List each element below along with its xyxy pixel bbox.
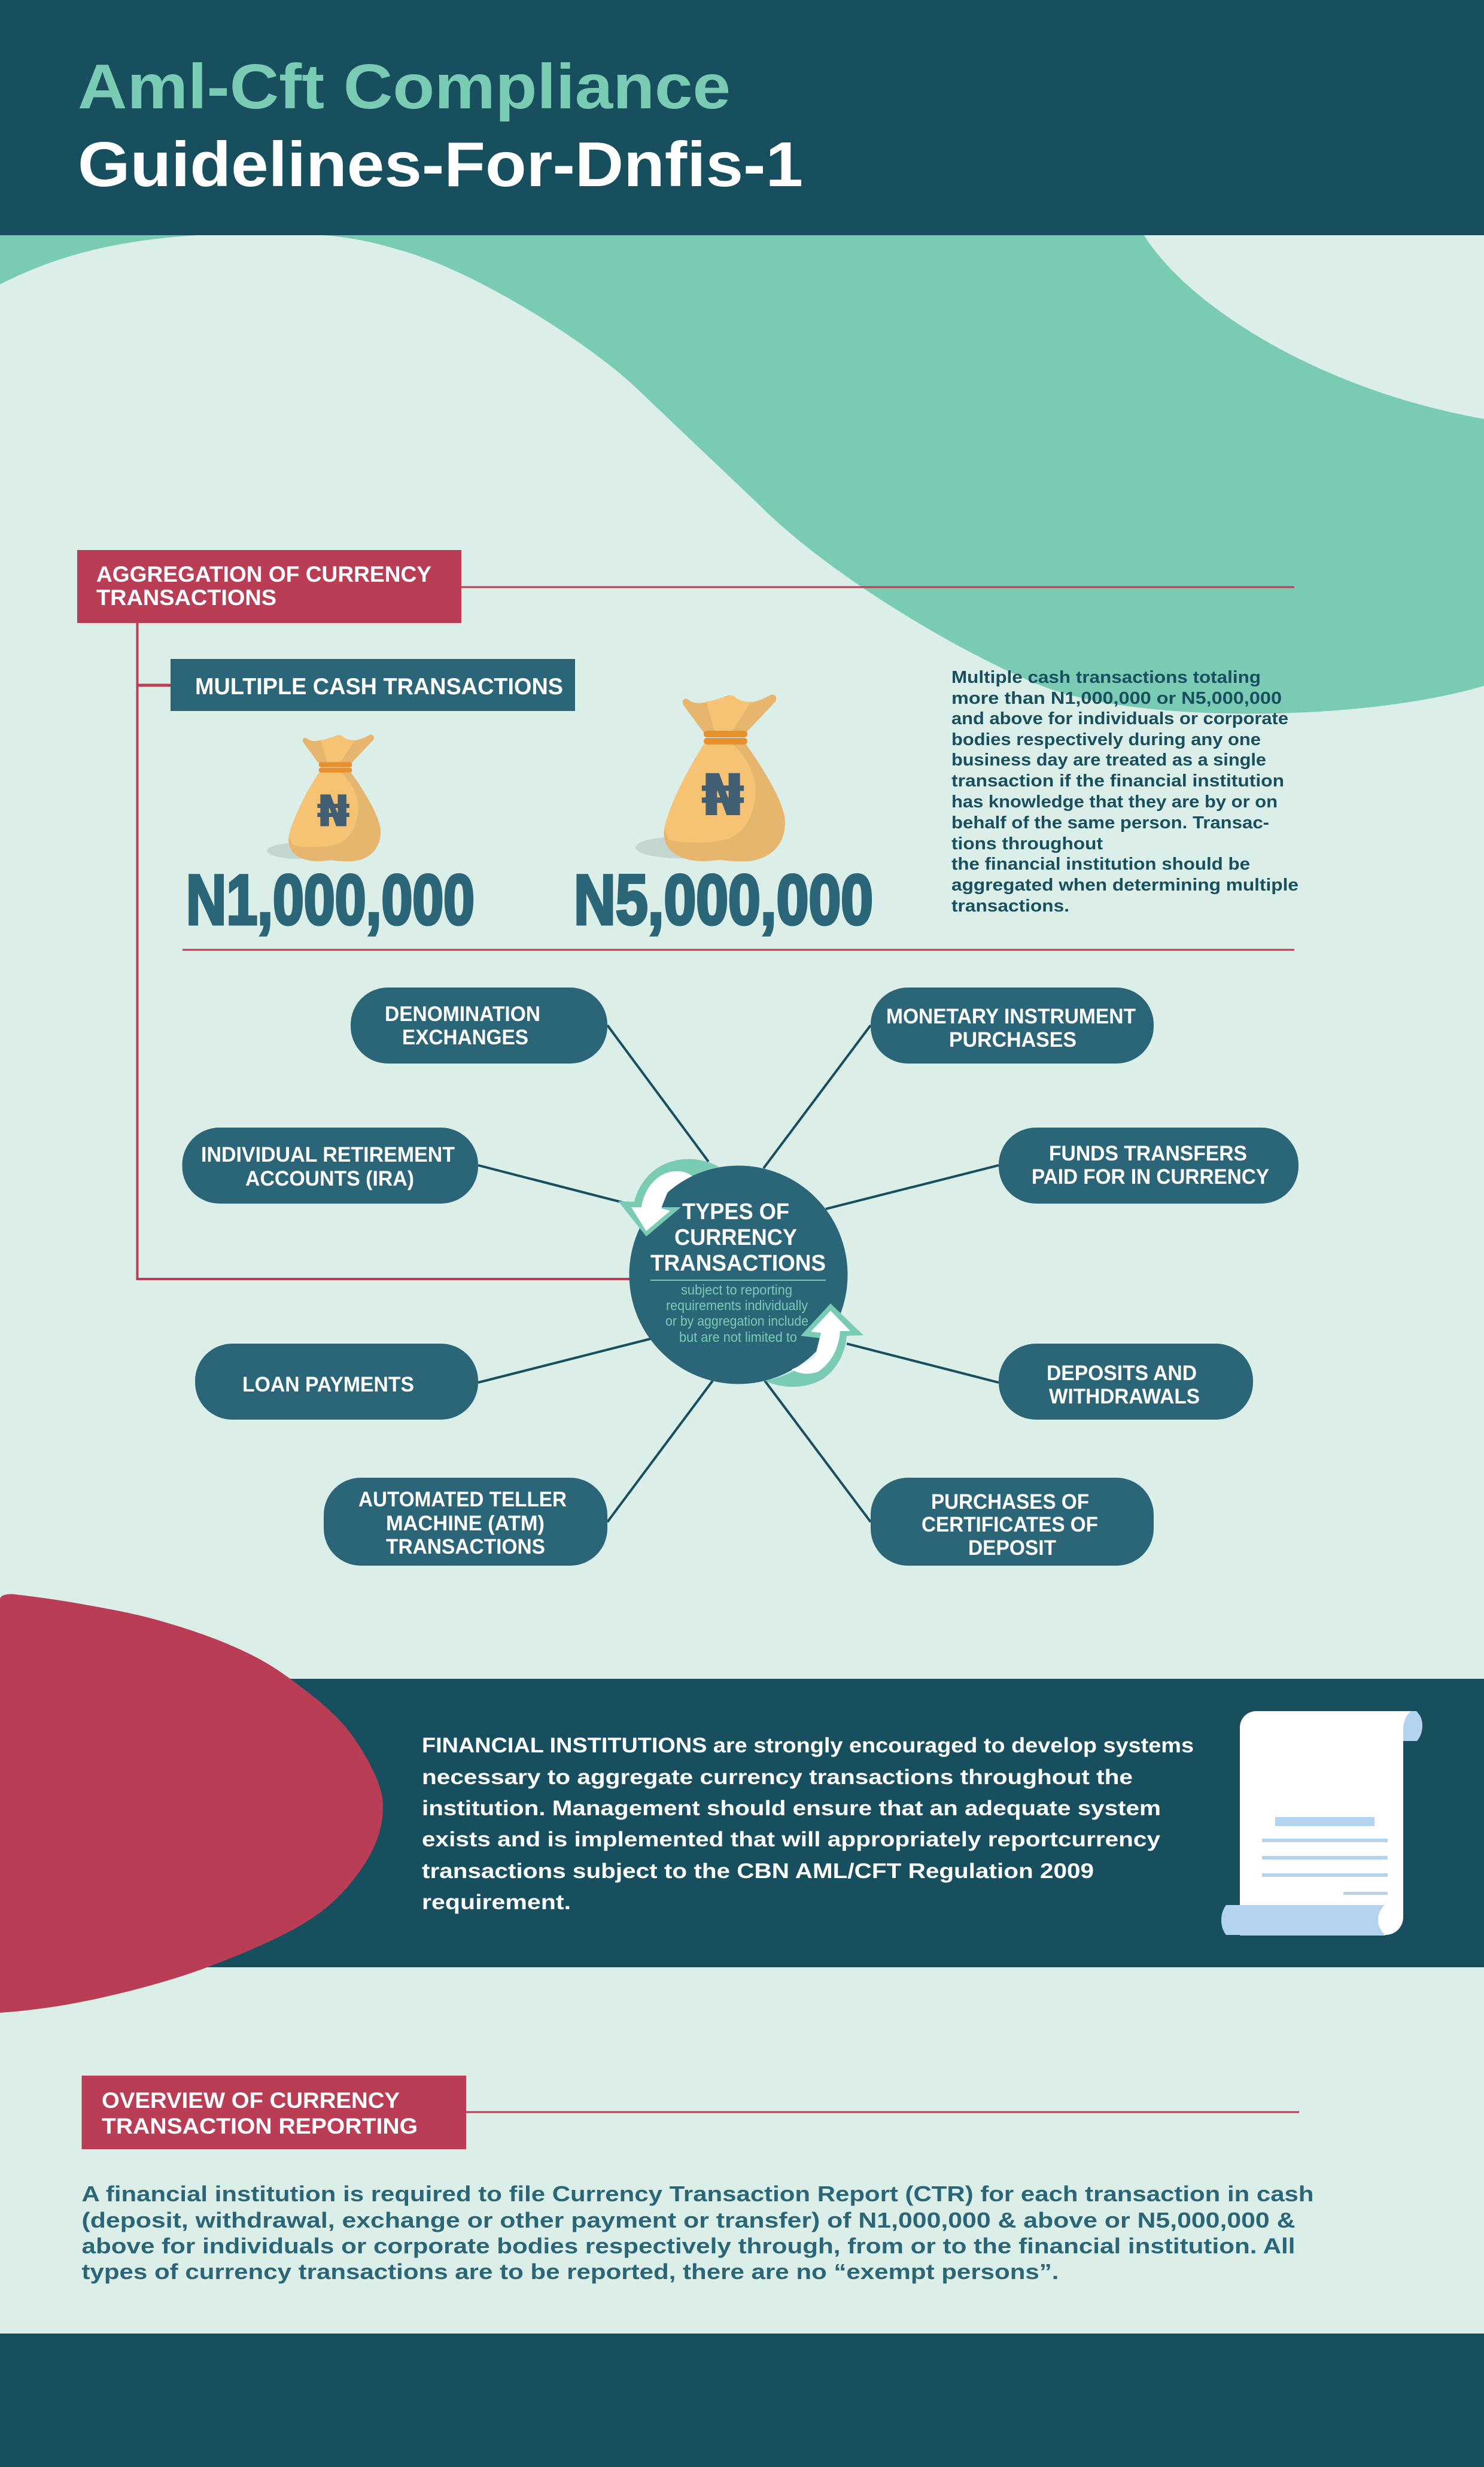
text block: currency transaction report overview: A financial institution is required to file Currency Transaction Report (CTR) for each transaction in cash xyxy=(81,2182,1314,2206)
hub: types of currency transactions: but are not limited to xyxy=(679,1329,797,1345)
text block: multiple cash transactions description: and above for individuals or corporate xyxy=(951,709,1288,728)
hub: types of currency transactions: subject to reporting xyxy=(681,1282,792,1298)
pill: purchases of certificates of deposit: CERTIFICATES OF xyxy=(922,1513,1098,1536)
title line 1: Aml-Cft Compliance xyxy=(78,51,731,122)
text block: multiple cash transactions description: bodies respectively during any one xyxy=(951,730,1261,749)
amount: N5,000,000: N5,000,000 xyxy=(574,861,873,940)
panel: financial institutions band xyxy=(0,1679,1484,1967)
pill: denomination exchanges: DENOMINATION xyxy=(385,1002,540,1026)
pill: funds transfers paid for in currency xyxy=(999,1128,1298,1204)
pill: denomination exchanges: EXCHANGES xyxy=(402,1026,528,1049)
text block: multiple cash transactions description: aggregated when determining multiple xyxy=(951,876,1298,895)
text block: multiple cash transactions description: tions throughout xyxy=(951,834,1103,853)
heading: overview of currency transaction reporting: TRANSACTION REPORTING xyxy=(102,2114,418,2138)
pill: purchases of certificates of deposit xyxy=(871,1478,1154,1566)
hub: types of currency transactions: requirements individually xyxy=(666,1298,808,1313)
text block: financial institutions xyxy=(422,1734,1194,1914)
background wave: teal shape xyxy=(0,227,1484,713)
text block: financial institutions: transactions subject to the CBN AML/CFT Regulation 2009 xyxy=(422,1860,1094,1883)
pill: automated teller machine transactions: AUTOMATED TELLER xyxy=(358,1488,567,1511)
pill: individual retirement accounts xyxy=(182,1128,478,1204)
icon: paper scroll xyxy=(1221,1711,1422,1936)
subheading: multiple cash transactions xyxy=(171,659,575,711)
pill: deposits and withdrawals: DEPOSITS AND xyxy=(1047,1362,1197,1385)
text block: financial institutions: necessary to aggregate currency transactions throughout the xyxy=(422,1766,1133,1789)
hub: types of currency transactions xyxy=(630,1166,847,1384)
subheading: multiple cash transactions: MULTIPLE CASH TRANSACTIONS xyxy=(195,674,563,700)
text block: multiple cash transactions description: transaction if the financial institution xyxy=(951,771,1284,791)
text block: multiple cash transactions description: the financial institution should be xyxy=(951,855,1250,874)
pill: automated teller machine transactions xyxy=(324,1478,607,1566)
title line 2: Guidelines-For-Dnfis-1 xyxy=(78,129,803,200)
text block: currency transaction report overview: types of currency transactions are to be reported, there are no “exempt persons”. xyxy=(81,2259,1059,2284)
pill: automated teller machine transactions: MACHINE (ATM) xyxy=(386,1512,545,1535)
text block: multiple cash transactions description: behalf of the same person. Transac- xyxy=(951,813,1269,833)
text block: currency transaction report overview: (deposit, withdrawal, exchange or other payment or transfer) of N1,000,000 & above or N5,000,000 & xyxy=(81,2208,1295,2232)
text block: multiple cash transactions description: Multiple cash transactions totaling xyxy=(951,668,1261,687)
connector lines from hub to pills xyxy=(478,1025,999,1522)
heading: overview of currency transaction reporting xyxy=(81,2076,466,2149)
pill: deposits and withdrawals xyxy=(999,1344,1253,1420)
text block: multiple cash transactions description: has knowledge that they are by or on xyxy=(951,792,1278,812)
heading: overview of currency transaction reporting: OVERVIEW OF CURRENCY xyxy=(102,2088,400,2113)
arrow: lower right cycle arrow xyxy=(765,1304,863,1387)
hub: types of currency transactions: or by aggregation include xyxy=(665,1313,808,1329)
text block: multiple cash transactions description xyxy=(951,668,1298,916)
heading: aggregation of currency transactions: AGGREGATION OF CURRENCY xyxy=(96,562,431,587)
pill: individual retirement accounts: INDIVIDUAL RETIREMENT xyxy=(201,1143,455,1166)
pill: monetary instrument purchases xyxy=(871,988,1154,1064)
footer band xyxy=(0,2334,1484,2467)
amount: N1,000,000: N1,000,000 xyxy=(186,861,475,940)
decorative red blob xyxy=(0,1594,383,2013)
icon: small money bag: ₦ xyxy=(317,786,350,837)
arrow: upper left cycle arrow xyxy=(618,1159,719,1236)
hub: types of currency transactions: CURRENCY xyxy=(674,1225,797,1250)
text block: financial institutions: requirement. xyxy=(422,1891,571,1914)
text block: financial institutions: FINANCIAL INSTITUTIONS are strongly encouraged to develop systems xyxy=(422,1734,1194,1757)
pill: denomination exchanges xyxy=(351,988,607,1064)
text block: financial institutions: exists and is implemented that will appropriately reportcurrency xyxy=(422,1828,1161,1851)
pill: purchases of certificates of deposit: DEPOSIT xyxy=(968,1536,1056,1560)
icon: large money bag: ₦ xyxy=(701,762,745,829)
header band xyxy=(0,0,1484,235)
text block: currency transaction report overview xyxy=(81,2182,1314,2284)
text block: currency transaction report overview: above for individuals or corporate bodies respectively through, from or to the financial institution. All xyxy=(81,2234,1295,2258)
text block: multiple cash transactions description: transactions. xyxy=(951,897,1069,916)
pill: funds transfers paid for in currency: FUNDS TRANSFERS xyxy=(1049,1142,1247,1165)
pill: deposits and withdrawals: WITHDRAWALS xyxy=(1049,1385,1200,1408)
pill: funds transfers paid for in currency: PAID FOR IN CURRENCY xyxy=(1032,1165,1269,1189)
pill: purchases of certificates of deposit: PURCHASES OF xyxy=(931,1490,1089,1514)
pill: automated teller machine transactions: TRANSACTIONS xyxy=(386,1535,545,1558)
icon: large money bag xyxy=(635,695,785,861)
hub: types of currency transactions: TYPES OF xyxy=(682,1199,789,1225)
icon: small money bag xyxy=(267,735,381,861)
heading: aggregation of currency transactions: TRANSACTIONS xyxy=(96,585,276,610)
section connector lines xyxy=(138,587,1294,1279)
hub: types of currency transactions: TRANSACTIONS xyxy=(650,1251,826,1276)
pill: individual retirement accounts: ACCOUNTS (IRA) xyxy=(245,1167,414,1190)
heading: aggregation of currency transactions xyxy=(77,550,461,623)
pill: loan payments: LOAN PAYMENTS xyxy=(242,1373,414,1396)
text block: multiple cash transactions description: more than N1,000,000 or N5,000,000 xyxy=(951,689,1282,708)
text block: financial institutions: institution. Management should ensure that an adequate system xyxy=(422,1797,1161,1820)
text block: multiple cash transactions description: business day are treated as a single xyxy=(951,751,1266,770)
pill: loan payments xyxy=(195,1344,478,1420)
pill: monetary instrument purchases: PURCHASES xyxy=(949,1028,1076,1052)
pill: monetary instrument purchases: MONETARY INSTRUMENT xyxy=(886,1005,1136,1028)
